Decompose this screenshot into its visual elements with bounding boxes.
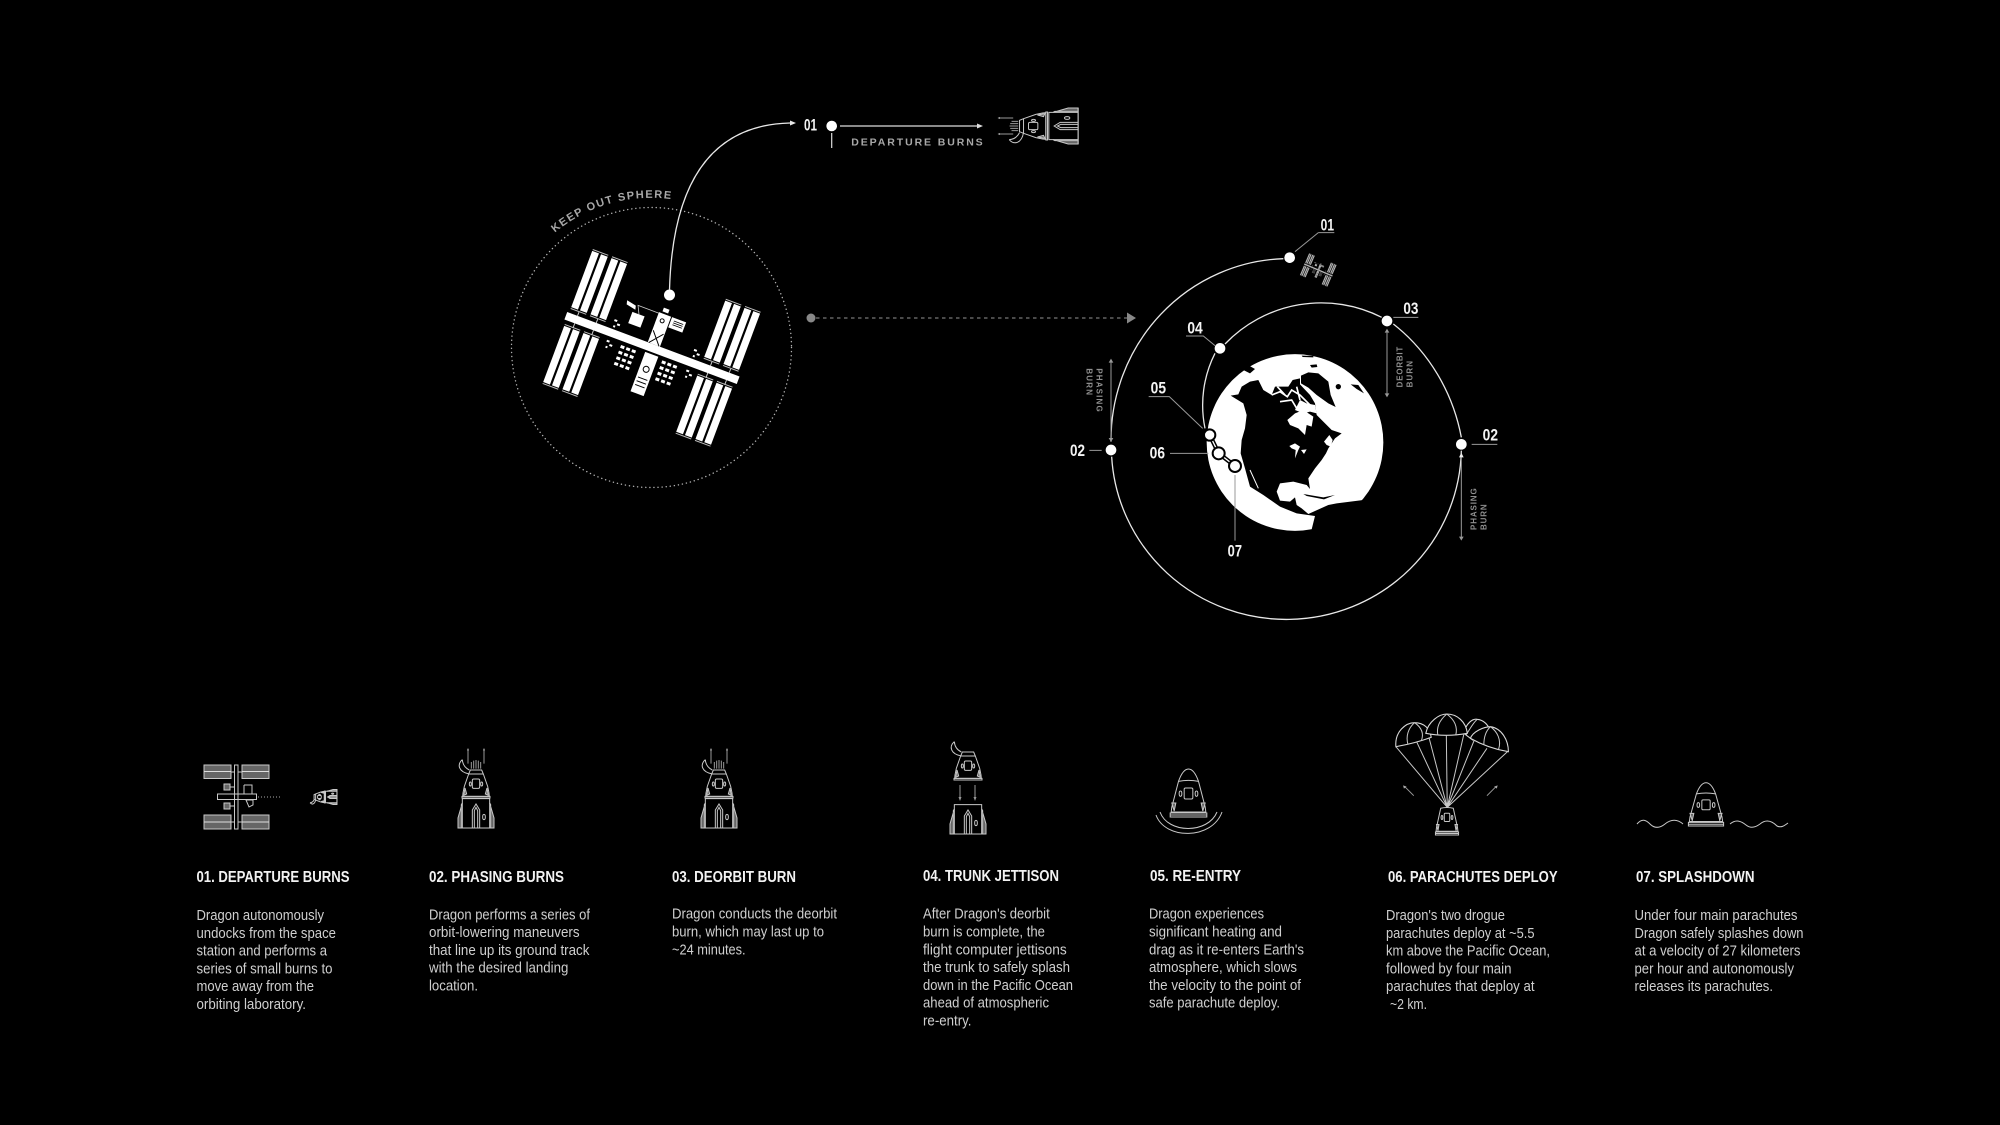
callout dot — [826, 121, 837, 131]
phasing burn right label — [1470, 488, 1489, 530]
orbit numbers: 05 — [1151, 378, 1166, 397]
icon: capsule on water — [1637, 783, 1788, 827]
heading: 04. TRUNK JETTISON — [923, 868, 1059, 885]
departure curve arrow — [670, 120, 796, 290]
phasing burn left label: PHASING — [1095, 368, 1104, 412]
orbit numbers: 07 — [1228, 542, 1242, 561]
heading: 03. DEORBIT BURN — [672, 869, 796, 886]
callout label: DEPARTURE BURNS — [851, 137, 983, 149]
description: km above the Pacific Ocean, — [1386, 944, 1550, 960]
description — [672, 907, 837, 958]
panel: step 04 trunk jettison — [923, 742, 1073, 1030]
dashed transition arrow — [806, 312, 1136, 324]
description: parachutes deploy at ~5.5 — [1386, 926, 1534, 942]
re-entry connectors — [1210, 435, 1235, 466]
description: series of small burns to — [196, 961, 332, 977]
description: location. — [429, 978, 478, 994]
orbit numbers: 02 — [1070, 441, 1085, 460]
description: followed by four main — [1386, 961, 1512, 977]
description: orbit-lowering maneuvers — [429, 925, 580, 941]
icon: earth — [1207, 354, 1387, 545]
callout arrow — [832, 124, 983, 148]
keep out sphere boundary — [512, 208, 792, 488]
icon: small station — [1300, 253, 1337, 287]
description — [1149, 907, 1304, 1012]
callout number 01: 01 — [804, 116, 817, 134]
phasing burn right label: PHASING — [1470, 488, 1479, 530]
burn arrows — [1109, 329, 1464, 541]
departure dot — [664, 290, 675, 300]
icon: capsule separating from trunk — [950, 742, 986, 834]
description: undocks from the space — [196, 926, 336, 942]
keep out sphere label: KEEP OUT SPHERE — [550, 190, 671, 232]
description: orbiting laboratory. — [196, 997, 306, 1013]
orbit numbers: 06 — [1150, 444, 1165, 463]
panel: space station keep out sphere — [510, 120, 796, 488]
description: station and performs a — [196, 944, 328, 960]
heading: 02. PHASING BURNS — [429, 869, 564, 886]
orbit paths — [1111, 259, 1461, 619]
orbit numbers: 04 — [1187, 318, 1203, 337]
description: Under four main parachutes — [1634, 908, 1798, 924]
orbit points — [1106, 252, 1467, 472]
description: drag as it re-enters Earth's — [1149, 942, 1304, 958]
callout lines — [1089, 233, 1497, 541]
description: Dragon's two drogue — [1386, 908, 1505, 924]
orbit numbers: 02 — [1483, 426, 1498, 445]
description: safe parachute deploy. — [1149, 996, 1280, 1012]
description: Dragon performs a series of — [429, 907, 591, 923]
panel: step 07 splashdown — [1634, 783, 1804, 995]
description: ~24 minutes. — [672, 942, 746, 958]
description — [1634, 908, 1804, 995]
description: flight computer jettisons — [923, 942, 1067, 958]
description: the velocity to the point of — [1149, 978, 1302, 994]
description: burn is complete, the — [923, 924, 1045, 940]
deorbit burn label: BURN — [1405, 361, 1414, 387]
panel: step 02 phasing burns — [428, 748, 591, 994]
heading: 05. RE-ENTRY — [1150, 868, 1241, 885]
panel: departure burns callout — [804, 108, 1078, 149]
description — [1386, 908, 1550, 1013]
panel: step 06 parachutes deploy — [1386, 714, 1558, 1013]
panel: step 03 deorbit burn — [672, 748, 837, 958]
heading: 07. SPLASHDOWN — [1636, 869, 1754, 886]
description: Dragon safely splashes down — [1634, 926, 1804, 942]
description: Dragon experiences — [1149, 907, 1264, 923]
description: re-entry. — [923, 1014, 972, 1030]
orbit numbers: 03 — [1403, 299, 1418, 318]
panel: orbit diagram — [1070, 216, 1498, 619]
icon: dragon phasing burn — [458, 748, 494, 828]
description: parachutes that deploy at — [1386, 979, 1534, 995]
heading: 01. DEPARTURE BURNS — [196, 869, 350, 886]
description: atmosphere, which slows — [1149, 960, 1297, 976]
icon: dragon deorbit burn — [701, 748, 737, 828]
description: releases its parachutes. — [1634, 979, 1773, 995]
description: the trunk to safely splash — [923, 960, 1070, 976]
orbit numbers — [1070, 216, 1498, 561]
panel: step 05 re-entry — [1149, 769, 1304, 1012]
heading: 06. PARACHUTES DEPLOY — [1388, 869, 1558, 886]
description — [196, 908, 336, 1013]
description: that line up its ground track — [429, 943, 590, 959]
panel: step 01 departure burns — [196, 765, 350, 1013]
description: ahead of atmospheric — [923, 996, 1049, 1012]
description — [923, 907, 1073, 1030]
phasing burn right label: BURN — [1480, 504, 1489, 530]
phasing burn left label: BURN — [1085, 368, 1094, 395]
description: significant heating and — [1149, 924, 1282, 940]
description: at a velocity of 27 kilometers — [1634, 944, 1800, 960]
description: burn, which may last up to — [672, 924, 824, 940]
orbit numbers: 01 — [1321, 216, 1334, 235]
description: down in the Pacific Ocean — [923, 978, 1073, 994]
description: per hour and autonomously — [1634, 961, 1795, 977]
description: with the desired landing — [428, 961, 568, 977]
description: ~2 km. — [1390, 997, 1427, 1013]
icon: parachutes and capsule — [1396, 714, 1508, 835]
description — [428, 907, 591, 994]
icon: station and dragon — [204, 765, 337, 829]
description: After Dragon's deorbit — [923, 907, 1050, 923]
icon: dragon departing — [998, 108, 1078, 144]
deorbit burn label — [1395, 347, 1414, 387]
description: Dragon conducts the deorbit — [672, 907, 837, 923]
icon: space station — [541, 249, 763, 447]
icon: capsule re-entry — [1156, 769, 1222, 833]
phasing burn left label — [1085, 368, 1104, 412]
description: move away from the — [196, 979, 314, 995]
deorbit burn label: DEORBIT — [1395, 347, 1404, 387]
description: Dragon autonomously — [196, 908, 325, 924]
